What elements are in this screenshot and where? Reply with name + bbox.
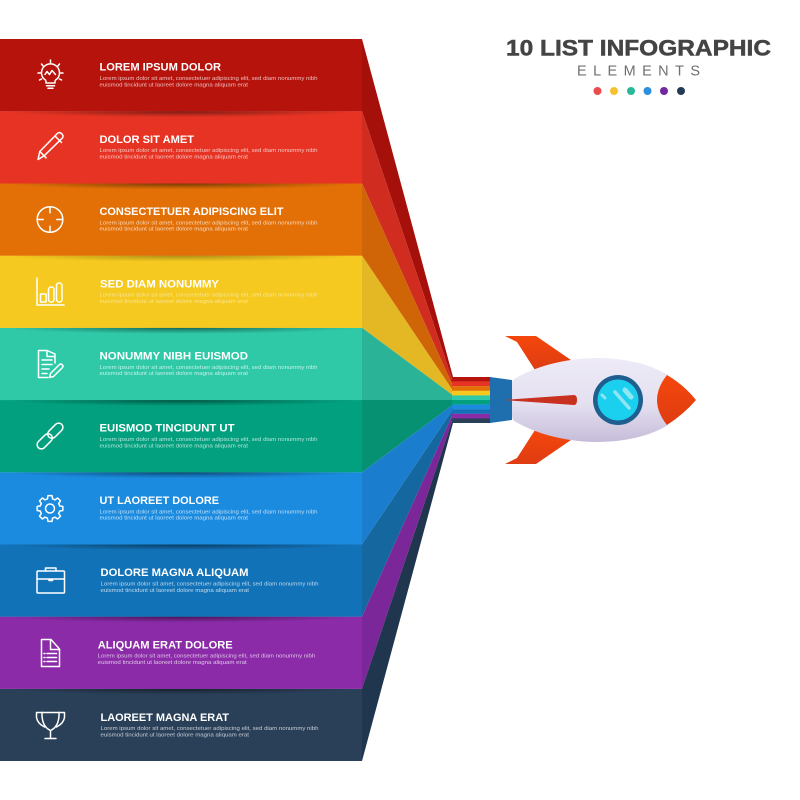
band shadow	[6, 683, 356, 695]
description line 2: euismod tincidunt ut laoreet dolore magna aliquam erat	[98, 660, 247, 666]
rocket body	[512, 358, 668, 442]
description: Lorem ipsum dolor sit amet, consectetuer adipiscing elit, sed diam nonummy nibh	[100, 220, 318, 226]
icon: gear	[37, 496, 63, 521]
panel 8: dolore magna aliquam	[0, 538, 362, 617]
description: Lorem ipsum dolor sit amet, consectetuer adipiscing elit, sed diam nonummy nibh	[100, 76, 318, 82]
heading: LOREM IPSUM DOLOR	[100, 62, 221, 74]
panel 9: aliquam erat dolore	[0, 611, 362, 689]
heading: EUISMOD TINCIDUNT UT	[100, 423, 235, 435]
band shadow	[6, 538, 356, 550]
bottom fin	[505, 430, 571, 464]
band shadow	[6, 466, 356, 478]
description line 2: euismod tincidunt ut laoreet dolore magna aliquam erat	[100, 516, 248, 522]
heading: CONSECTETUER ADIPISCING ELIT	[100, 206, 284, 218]
icon: light bulb	[38, 60, 63, 88]
description line 2: euismod tincidunt ut laoreet dolore magna aliquam erat	[100, 154, 248, 160]
heading: SED DIAM NONUMMY	[100, 278, 220, 290]
description: Lorem ipsum dolor sit amet, consectetuer adipiscing elit, sed diam nonummy nibh	[100, 365, 318, 371]
icon: chain link	[35, 421, 65, 451]
icon: crosshair	[37, 207, 63, 232]
panel 6: euismod tincidunt ut	[0, 394, 362, 472]
heading: DOLORE MAGNA ALIQUAM	[100, 567, 249, 579]
panel 10: laoreet magna erat	[0, 683, 362, 761]
band shadow	[6, 611, 356, 623]
heading: LAOREET MAGNA ERAT	[100, 712, 229, 724]
description line 2: euismod tincidunt ut laoreet dolore magna aliquam erat	[100, 82, 248, 88]
description: Lorem ipsum dolor sit amet, consectetuer adipiscing elit, sed diam nonummy nibh	[100, 509, 318, 515]
side stripe	[503, 395, 577, 405]
subtitle: ELEMENTS	[577, 64, 700, 80]
description: Lorem ipsum dolor sit amet, consectetuer adipiscing elit, sed diam nonummy nibh	[100, 726, 318, 732]
rocket	[490, 336, 696, 464]
heading: DOLOR SIT AMET	[100, 134, 194, 146]
rainbow exhaust stripes	[452, 377, 491, 423]
description line 2: euismod tincidunt ut laoreet dolore magna aliquam erat	[100, 588, 249, 594]
panel 1: lorem ipsum dolor	[0, 39, 362, 111]
icon: pencil	[38, 133, 63, 160]
funnel fan converging on the rocket	[362, 39, 453, 761]
icon: document	[42, 640, 60, 666]
heading: NONUMMY NIBH EUISMOD	[100, 350, 248, 362]
icon: trophy	[36, 712, 64, 738]
description: Lorem ipsum dolor sit amet, consectetuer adipiscing elit, sed diam nonummy nibh	[100, 582, 318, 588]
heading: UT LAOREET DOLORE	[100, 495, 220, 507]
description: Lorem ipsum dolor sit amet, consectetuer adipiscing elit, sed diam nonummy nibh	[100, 148, 318, 154]
band shadow	[6, 177, 356, 189]
description line 2: euismod tincidunt ut laoreet dolore magna aliquam erat	[100, 443, 248, 449]
band shadow	[6, 394, 356, 406]
nozzle	[490, 377, 512, 423]
panel 4: sed diam nonummy	[0, 250, 362, 328]
panel 2: dolor sit amet	[0, 105, 362, 184]
description line 2: euismod tincidunt ut laoreet dolore magna aliquam erat	[100, 299, 248, 305]
description: Lorem ipsum dolor sit amet, consectetuer adipiscing elit, sed diam nonummy nibh	[98, 654, 315, 660]
band shadow	[6, 250, 356, 262]
top fin	[505, 336, 571, 370]
colour dots	[594, 87, 685, 95]
heading: ALIQUAM ERAT DOLORE	[98, 639, 233, 651]
title block	[506, 36, 771, 95]
band shadow	[6, 322, 356, 334]
rocket nose	[657, 375, 696, 425]
title: 10 LIST INFOGRAPHIC	[506, 36, 771, 60]
description line 2: euismod tincidunt ut laoreet dolore magna aliquam erat	[100, 227, 248, 233]
description: Lorem ipsum dolor sit amet, consectetuer adipiscing elit, sed diam nonummy nibh	[100, 293, 318, 299]
icon: bar chart	[37, 278, 64, 305]
description line 2: euismod tincidunt ut laoreet dolore magna aliquam erat	[100, 732, 249, 738]
porthole	[593, 375, 643, 425]
description: Lorem ipsum dolor sit amet, consectetuer adipiscing elit, sed diam nonummy nibh	[100, 437, 318, 443]
panel 5: nonummy nibh euismod	[0, 322, 362, 400]
band shadow	[6, 105, 356, 117]
panel 7: ut laoreet dolore	[0, 466, 362, 544]
icon: briefcase	[37, 568, 64, 593]
icon: document with pen	[38, 350, 63, 378]
panel 3: consectetuer adipiscing elit	[0, 177, 362, 256]
description line 2: euismod tincidunt ut laoreet dolore magna aliquam erat	[100, 371, 248, 377]
